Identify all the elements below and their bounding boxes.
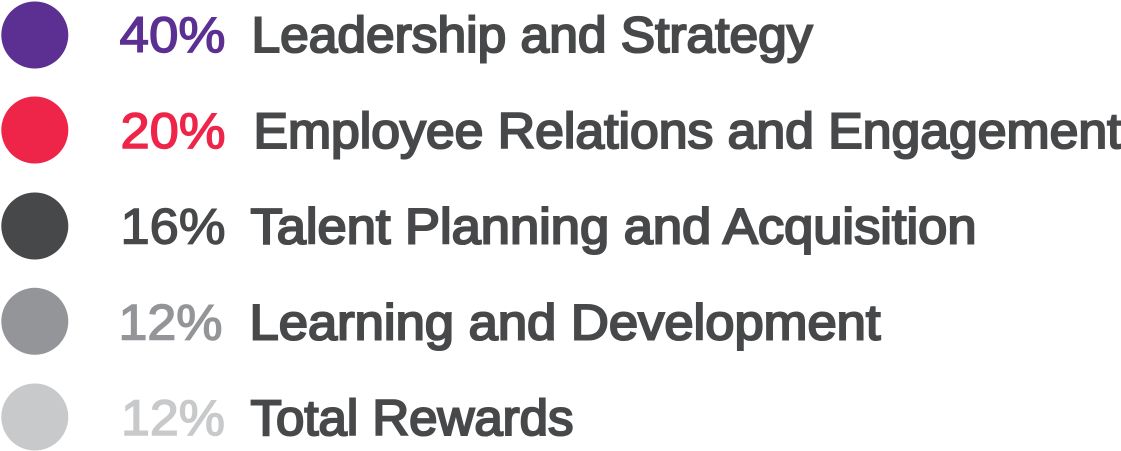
value: 16%: 16%: [120, 198, 226, 254]
row: Learning and Development: [1, 288, 881, 355]
value: 12%: 12%: [118, 294, 222, 350]
label: Leadership and Strategy: Leadership and Strategy: [252, 7, 812, 63]
label: Employee Relations and Engagement: Employee Relations and Engagement: [254, 103, 1121, 159]
swatch: light grey: [1, 384, 68, 450]
label: Learning and Development: Learning and Development: [250, 294, 881, 350]
row: Leadership and Strategy: [1, 2, 813, 68]
row: Employee Relations and Engagement: [1, 96, 1121, 164]
value: 40%: 40%: [120, 7, 226, 63]
label: Total Rewards: Total Rewards: [250, 390, 574, 446]
value: 20%: 20%: [120, 103, 226, 159]
value: 12%: 12%: [121, 390, 225, 446]
swatch: dark grey: [1, 192, 68, 260]
row: Total Rewards: [1, 384, 574, 450]
swatch: mid grey: [1, 288, 68, 355]
label: Talent Planning and Acquisition: Talent Planning and Acquisition: [250, 198, 976, 254]
swatch: red: [1, 96, 68, 164]
row: Talent Planning and Acquisition: [1, 192, 977, 260]
swatch: purple: [1, 2, 68, 68]
